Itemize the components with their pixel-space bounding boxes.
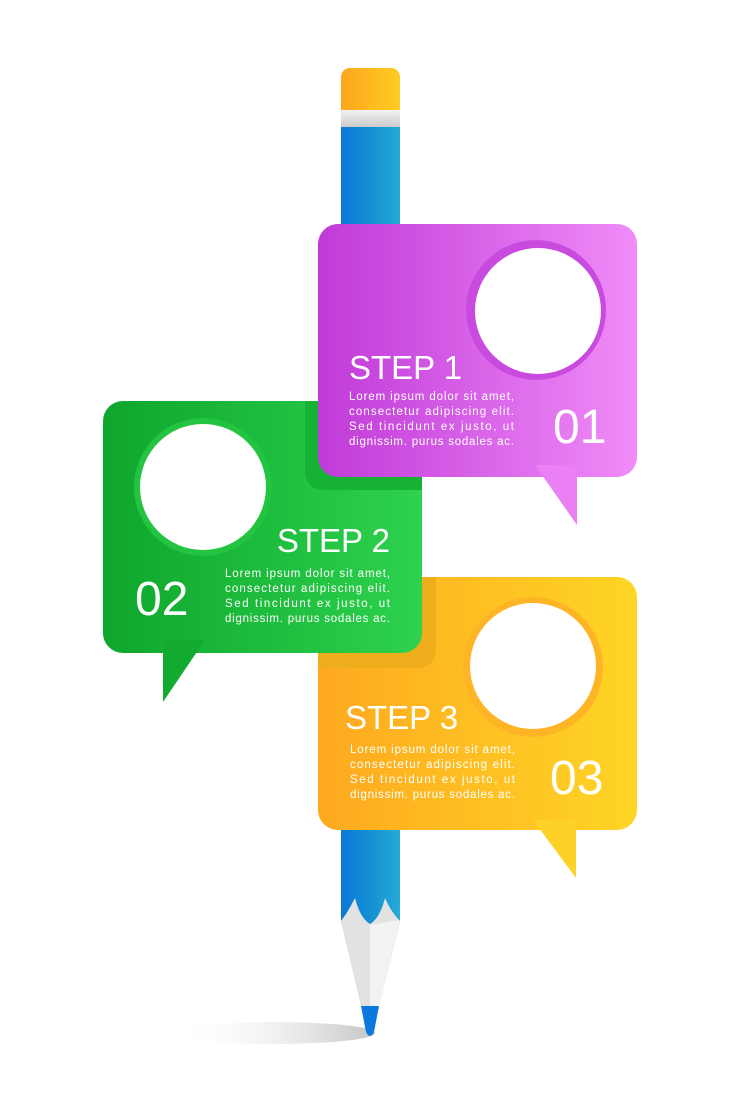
number 02: 02	[135, 573, 188, 626]
shadow of step 2 box	[318, 577, 436, 668]
pencil	[341, 68, 400, 1036]
text block: step 2: Sed tincidunt ex justo, ut	[225, 598, 391, 610]
icon: circle placeholder 3	[463, 597, 603, 737]
text block: step 1: dignissim. purus sodales ac.	[349, 436, 514, 448]
shadow of step 1 box	[305, 401, 422, 490]
text block: step 1: Sed tincidunt ex justo, ut	[349, 421, 515, 433]
text block: step 2: dignissim. purus sodales ac.	[225, 613, 390, 625]
text block: step 3: dignissim. purus sodales ac.	[350, 789, 515, 801]
panel: step 3 (yellow)	[318, 577, 637, 878]
text block: step 2: Lorem ipsum dolor sit amet,	[225, 568, 390, 580]
text block: step 3: consectetur adipiscing elit.	[350, 759, 515, 771]
text block: step 1: Lorem ipsum dolor sit amet,	[349, 391, 514, 403]
pencil shadow	[175, 1022, 375, 1044]
number 03: 03	[550, 752, 603, 805]
panel: step 1 (purple)	[318, 224, 637, 525]
text block: step 3: Lorem ipsum dolor sit amet,	[350, 744, 515, 756]
heading: STEP 1: STEP 1	[349, 349, 462, 386]
heading: STEP 3: STEP 3	[345, 699, 458, 736]
text block: step 1: consectetur adipiscing elit.	[349, 406, 514, 418]
panel: step 2 (green)	[103, 401, 422, 702]
text block: step 3: Sed tincidunt ex justo, ut	[350, 774, 516, 786]
icon: circle placeholder 2	[134, 418, 272, 556]
heading: STEP 2: STEP 2	[277, 522, 390, 559]
icon: circle placeholder 1	[466, 240, 606, 380]
number 01: 01	[553, 401, 606, 454]
text block: step 2: consectetur adipiscing elit.	[225, 583, 390, 595]
